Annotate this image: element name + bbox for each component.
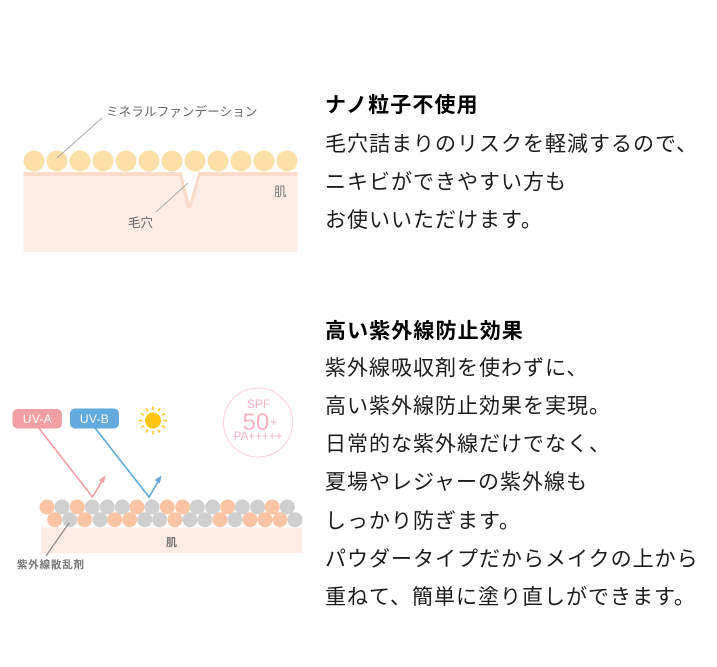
badge: SPF 50+ PA+++++: PA+++++ bbox=[234, 430, 283, 443]
mineral foundation particles bbox=[24, 150, 298, 172]
text block: high UV protection: 紫外線吸収剤を使わずに、 bbox=[325, 357, 588, 380]
UV-A badge: UV-A bbox=[23, 412, 52, 426]
text block: high UV protection: 高い紫外線防止効果を実現。 bbox=[325, 395, 611, 418]
text block: high UV protection: 重ねて、簡単に塗り直しができます。 bbox=[325, 586, 696, 609]
diagram: UV scattering bbox=[12, 388, 302, 571]
UV scattering particles bbox=[40, 500, 302, 527]
UV-B arrow bbox=[95, 428, 161, 497]
text block: no nanoparticles bbox=[325, 133, 698, 232]
label: skin: 肌 bbox=[274, 185, 287, 199]
UV-B badge bbox=[70, 408, 119, 428]
leader line: pore bbox=[156, 183, 188, 212]
text block: no nanoparticles: 毛穴詰まりのリスクを軽減するので、 bbox=[325, 133, 698, 156]
badge: SPF 50+ PA+++++: 50 bbox=[242, 409, 269, 436]
diagram: mineral foundation on skin bbox=[24, 104, 298, 252]
skin layer bbox=[41, 528, 302, 553]
badge: SPF 50+ PA+++++ bbox=[224, 388, 292, 457]
heading: no nanoparticles: ナノ粒子不使用 bbox=[325, 94, 479, 117]
text block: high UV protection: 日常的な紫外線だけでなく、 bbox=[325, 433, 611, 456]
text block: no nanoparticles: お使いいただけます。 bbox=[325, 209, 543, 232]
UV-A arrow bbox=[38, 427, 105, 497]
heading: high UV protection: 高い紫外線防止効果 bbox=[325, 320, 524, 343]
text block: no nanoparticles: ニキビができやすい方も bbox=[325, 171, 567, 194]
label: skin: 肌 bbox=[166, 536, 177, 549]
text block: high UV protection bbox=[325, 357, 699, 609]
skin layer with pore bbox=[24, 172, 298, 252]
label: pore: 毛穴 bbox=[128, 216, 154, 230]
icon: sun bbox=[139, 406, 167, 434]
badge: SPF 50+ PA+++++: SPF bbox=[247, 397, 270, 411]
leader line: foundation bbox=[57, 118, 102, 158]
leader line: scattering agent bbox=[46, 523, 69, 556]
label: scattering agent: 紫外線散乱剤 bbox=[17, 558, 85, 571]
UV-A badge bbox=[12, 409, 62, 428]
label: mineral foundation: ミネラルファンデーション bbox=[106, 104, 258, 119]
text block: high UV protection: パウダータイプだからメイクの上から bbox=[325, 548, 699, 571]
text block: high UV protection: しっかり防ぎます。 bbox=[325, 510, 521, 533]
UV-B badge: UV-B bbox=[80, 412, 109, 426]
text block: high UV protection: 夏場やレジャーの紫外線も bbox=[325, 471, 588, 494]
badge: SPF 50+ PA+++++: + bbox=[270, 414, 278, 429]
